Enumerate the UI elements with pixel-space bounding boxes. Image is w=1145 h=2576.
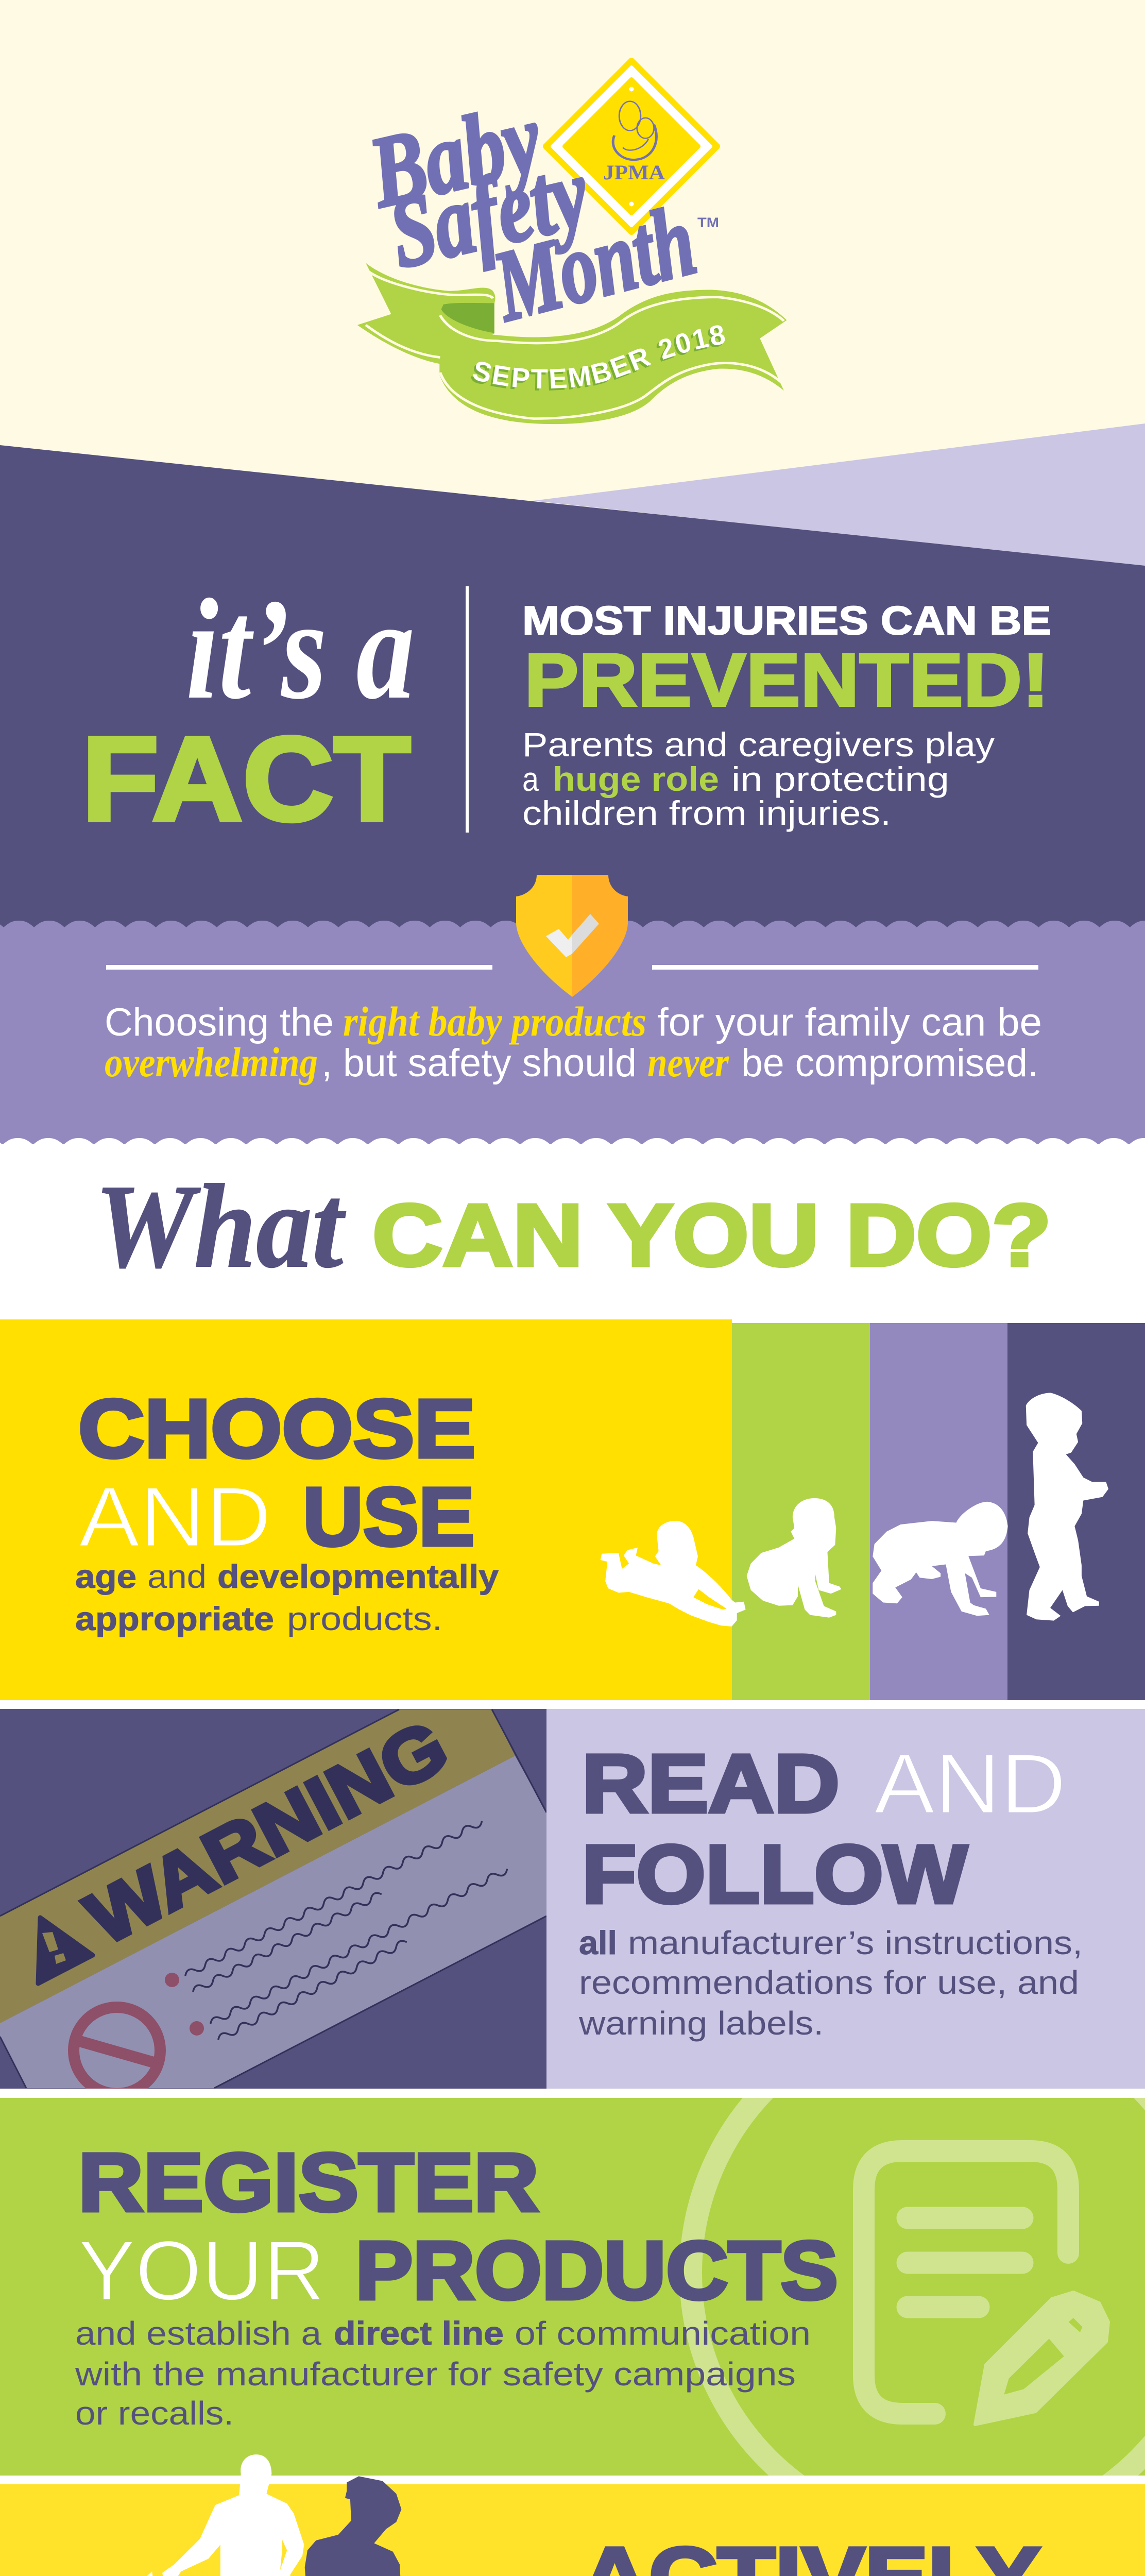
panel: choosing (0, 875, 1145, 1145)
text: instructions: all (579, 1924, 617, 1961)
heading: choose: CHOOSE (78, 1382, 475, 1475)
panel: it's a fact background (0, 445, 1145, 927)
icon: baby growth silhouettes (601, 1393, 1108, 1626)
silhouette: crawling baby (873, 1502, 1008, 1616)
text: instructions (578, 1924, 1083, 2042)
text: age appropriate: developmentally (217, 1558, 499, 1595)
heading: your products: PRODUCTS (355, 2224, 838, 2316)
text: age appropriate: age (75, 1558, 136, 1595)
text: choosing the right products: be compromised. (741, 1041, 1038, 1085)
heading: prevented: PREVENTED! (524, 638, 1049, 722)
it's a: it’s a (186, 569, 415, 729)
panel: read and follow (0, 1704, 1145, 2094)
text: age appropriate (75, 1558, 499, 1637)
background: cream header (0, 0, 1145, 567)
text: choosing the right products: Choosing the (105, 1001, 334, 1044)
ribbon (357, 263, 787, 424)
text: choosing the right products: for your family can be (657, 1001, 1042, 1044)
text: parents: in protecting (731, 760, 949, 798)
JPMA diamond: JPMA (603, 161, 665, 184)
heading: What can you do (95, 1160, 1051, 1293)
trademark: TM (697, 215, 719, 230)
heading: register: REGISTER (78, 2136, 539, 2228)
text: parents (522, 725, 995, 832)
heading: and use (79, 1469, 474, 1564)
logo word Baby: Baby (360, 82, 551, 229)
text: direct line (75, 2315, 811, 2432)
header lavender wedge (533, 423, 1145, 567)
logo word Safety: Safety (380, 137, 599, 290)
text: instructions: warning labels. (578, 2005, 824, 2042)
silhouette: man (162, 2454, 304, 2576)
silhouette: standing toddler (1026, 1393, 1108, 1621)
text: age appropriate: appropriate (75, 1600, 274, 1637)
heading: What can you do: What (95, 1160, 346, 1293)
silhouette: stroller (14, 2571, 174, 2576)
heading: and use: AND (79, 1469, 271, 1564)
text: age appropriate: products. (287, 1600, 442, 1637)
text: direct line: and establish a (75, 2315, 321, 2352)
icon: document and pencil (864, 2151, 1108, 2425)
FACT: FACT (82, 713, 411, 846)
text: choosing the right products (105, 998, 1042, 1086)
logo word Month: Month (483, 184, 706, 343)
illustration: warning label (0, 1704, 546, 2094)
heading: most injuries: MOST INJURIES CAN BE (522, 598, 1051, 643)
ribbon date: SEPTEMBER 2018 (473, 325, 725, 388)
silhouette: sitting baby (747, 1498, 841, 1618)
text: parents: huge role (553, 760, 719, 798)
text: choosing the right products: overwhelming (105, 1039, 318, 1086)
icon: warning triangle (38, 1918, 93, 1984)
heading: read and (582, 1736, 1066, 1831)
icon: prohibition sign (74, 2007, 160, 2094)
text: choosing the right products: right baby products (343, 998, 646, 1045)
text: direct line: or recalls. (75, 2395, 234, 2432)
text: instructions: recommendations for use, and (579, 1964, 1079, 2001)
wavy text lines (184, 1819, 508, 2042)
text: instructions: manufacturer’s instructions, (628, 1924, 1083, 1961)
text: age appropriate: and (147, 1558, 207, 1595)
icon: shield (516, 875, 628, 997)
heading: What can you do: CAN YOU DO? (372, 1187, 1051, 1284)
panel: choose and use (0, 1319, 1145, 1700)
heading: your products: YOUR (78, 2223, 325, 2318)
text: choosing the right products: , but safety should (321, 1041, 637, 1085)
text: choosing the right products: never (647, 1039, 729, 1086)
panel: register your products (0, 2098, 1145, 2476)
text: parents: Parents and caregivers play (522, 725, 995, 764)
heading: read and: READ (582, 1737, 840, 1829)
JPMA diamond (546, 61, 717, 232)
warning word: WARNING (74, 1704, 460, 1960)
text: direct line: direct line (334, 2315, 504, 2352)
panel: actively supervise background (0, 2484, 1145, 2576)
heading: your products (78, 2223, 838, 2318)
logo: Baby Safety Month (357, 58, 787, 425)
divider (466, 586, 469, 833)
silhouette: woman (305, 2476, 414, 2576)
text: parents: children from injuries. (522, 794, 891, 832)
ribbon date shadow: SEPTEMBER 2018 (471, 328, 722, 391)
heading: follow: FOLLOW (582, 1828, 967, 1920)
illustration: family silhouettes (14, 2454, 521, 2576)
bullet dots (165, 1973, 204, 2036)
silhouette: lying baby (601, 1521, 746, 1626)
heading: read and: AND (874, 1736, 1066, 1831)
text: parents: a (522, 760, 539, 798)
heading: and use: USE (303, 1470, 474, 1563)
icon ring (680, 2098, 1145, 2476)
text: direct line: of communication (515, 2315, 811, 2352)
text: direct line: with the manufacturer for safety campaigns (75, 2355, 796, 2393)
